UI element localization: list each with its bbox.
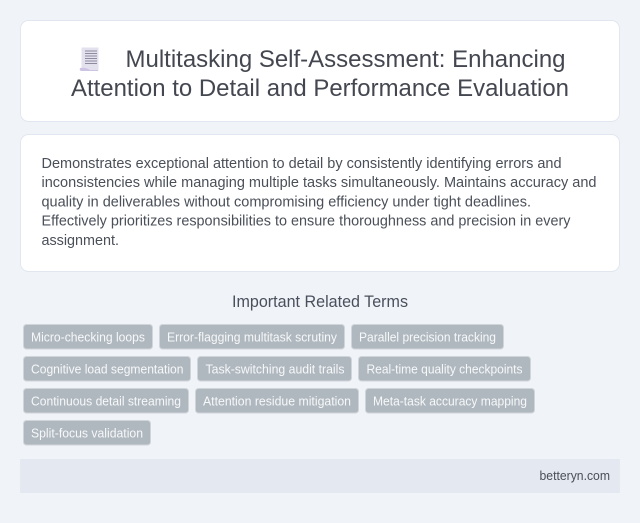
tag: Attention residue mitigation <box>196 388 358 413</box>
heading line 1: Multitasking Self-Assessment: Enhancing <box>126 46 566 73</box>
tag: Parallel precision tracking <box>352 324 504 349</box>
tag: Micro-checking loops <box>24 324 152 349</box>
tag: Continuous detail streaming: Continuous detail streaming <box>31 394 181 408</box>
tag: Attention residue mitigation: Attention residue mitigation <box>203 394 351 408</box>
tag: Real-time quality checkpoints <box>358 356 530 381</box>
tag: Meta-task accuracy mapping <box>366 388 534 413</box>
footer source text: betteryn.com <box>540 469 610 483</box>
description text: Demonstrates exceptional attention to detail by consistently identifying errors and <box>42 156 562 172</box>
heading: Important Related Terms: Important Related Terms <box>232 293 408 311</box>
description text: Effectively prioritizes responsibilities to ensure thoroughness and precision in every <box>42 214 571 230</box>
tag: Cognitive load segmentation: Cognitive load segmentation <box>31 362 184 376</box>
description text: inconsistencies while managing multiple tasks simultaneously. Maintains accuracy and <box>42 175 596 191</box>
tag: Split-focus validation: Split-focus validation <box>31 426 143 440</box>
tag: Task-switching audit trails <box>198 356 352 381</box>
description text <box>42 156 596 249</box>
tag: Error-flagging multitask scrutiny: Error-flagging multitask scrutiny <box>167 330 338 344</box>
description text: assignment. <box>42 233 119 249</box>
tag: Micro-checking loops: Micro-checking loops <box>31 330 145 344</box>
tag: Continuous detail streaming <box>24 388 188 413</box>
tag: Real-time quality checkpoints: Real-time quality checkpoints <box>366 362 522 376</box>
tag: Parallel precision tracking: Parallel precision tracking <box>359 330 496 344</box>
tag: Split-focus validation <box>24 420 150 445</box>
footer bar <box>20 459 620 493</box>
tag: Error-flagging multitask scrutiny <box>160 324 344 349</box>
tag list <box>24 324 534 445</box>
tag: Meta-task accuracy mapping: Meta-task accuracy mapping <box>373 394 527 408</box>
description text: quality in deliverables without compromising efficiency under tight deadlines. <box>42 194 531 210</box>
panel: title card <box>20 20 620 122</box>
icon: document receipt <box>80 48 98 71</box>
panel: description card <box>20 134 620 272</box>
tag: Cognitive load segmentation <box>24 356 190 381</box>
tag: Task-switching audit trails: Task-switching audit trails <box>206 362 344 376</box>
heading line 2: Attention to Detail and Performance Evaluation <box>71 75 569 102</box>
